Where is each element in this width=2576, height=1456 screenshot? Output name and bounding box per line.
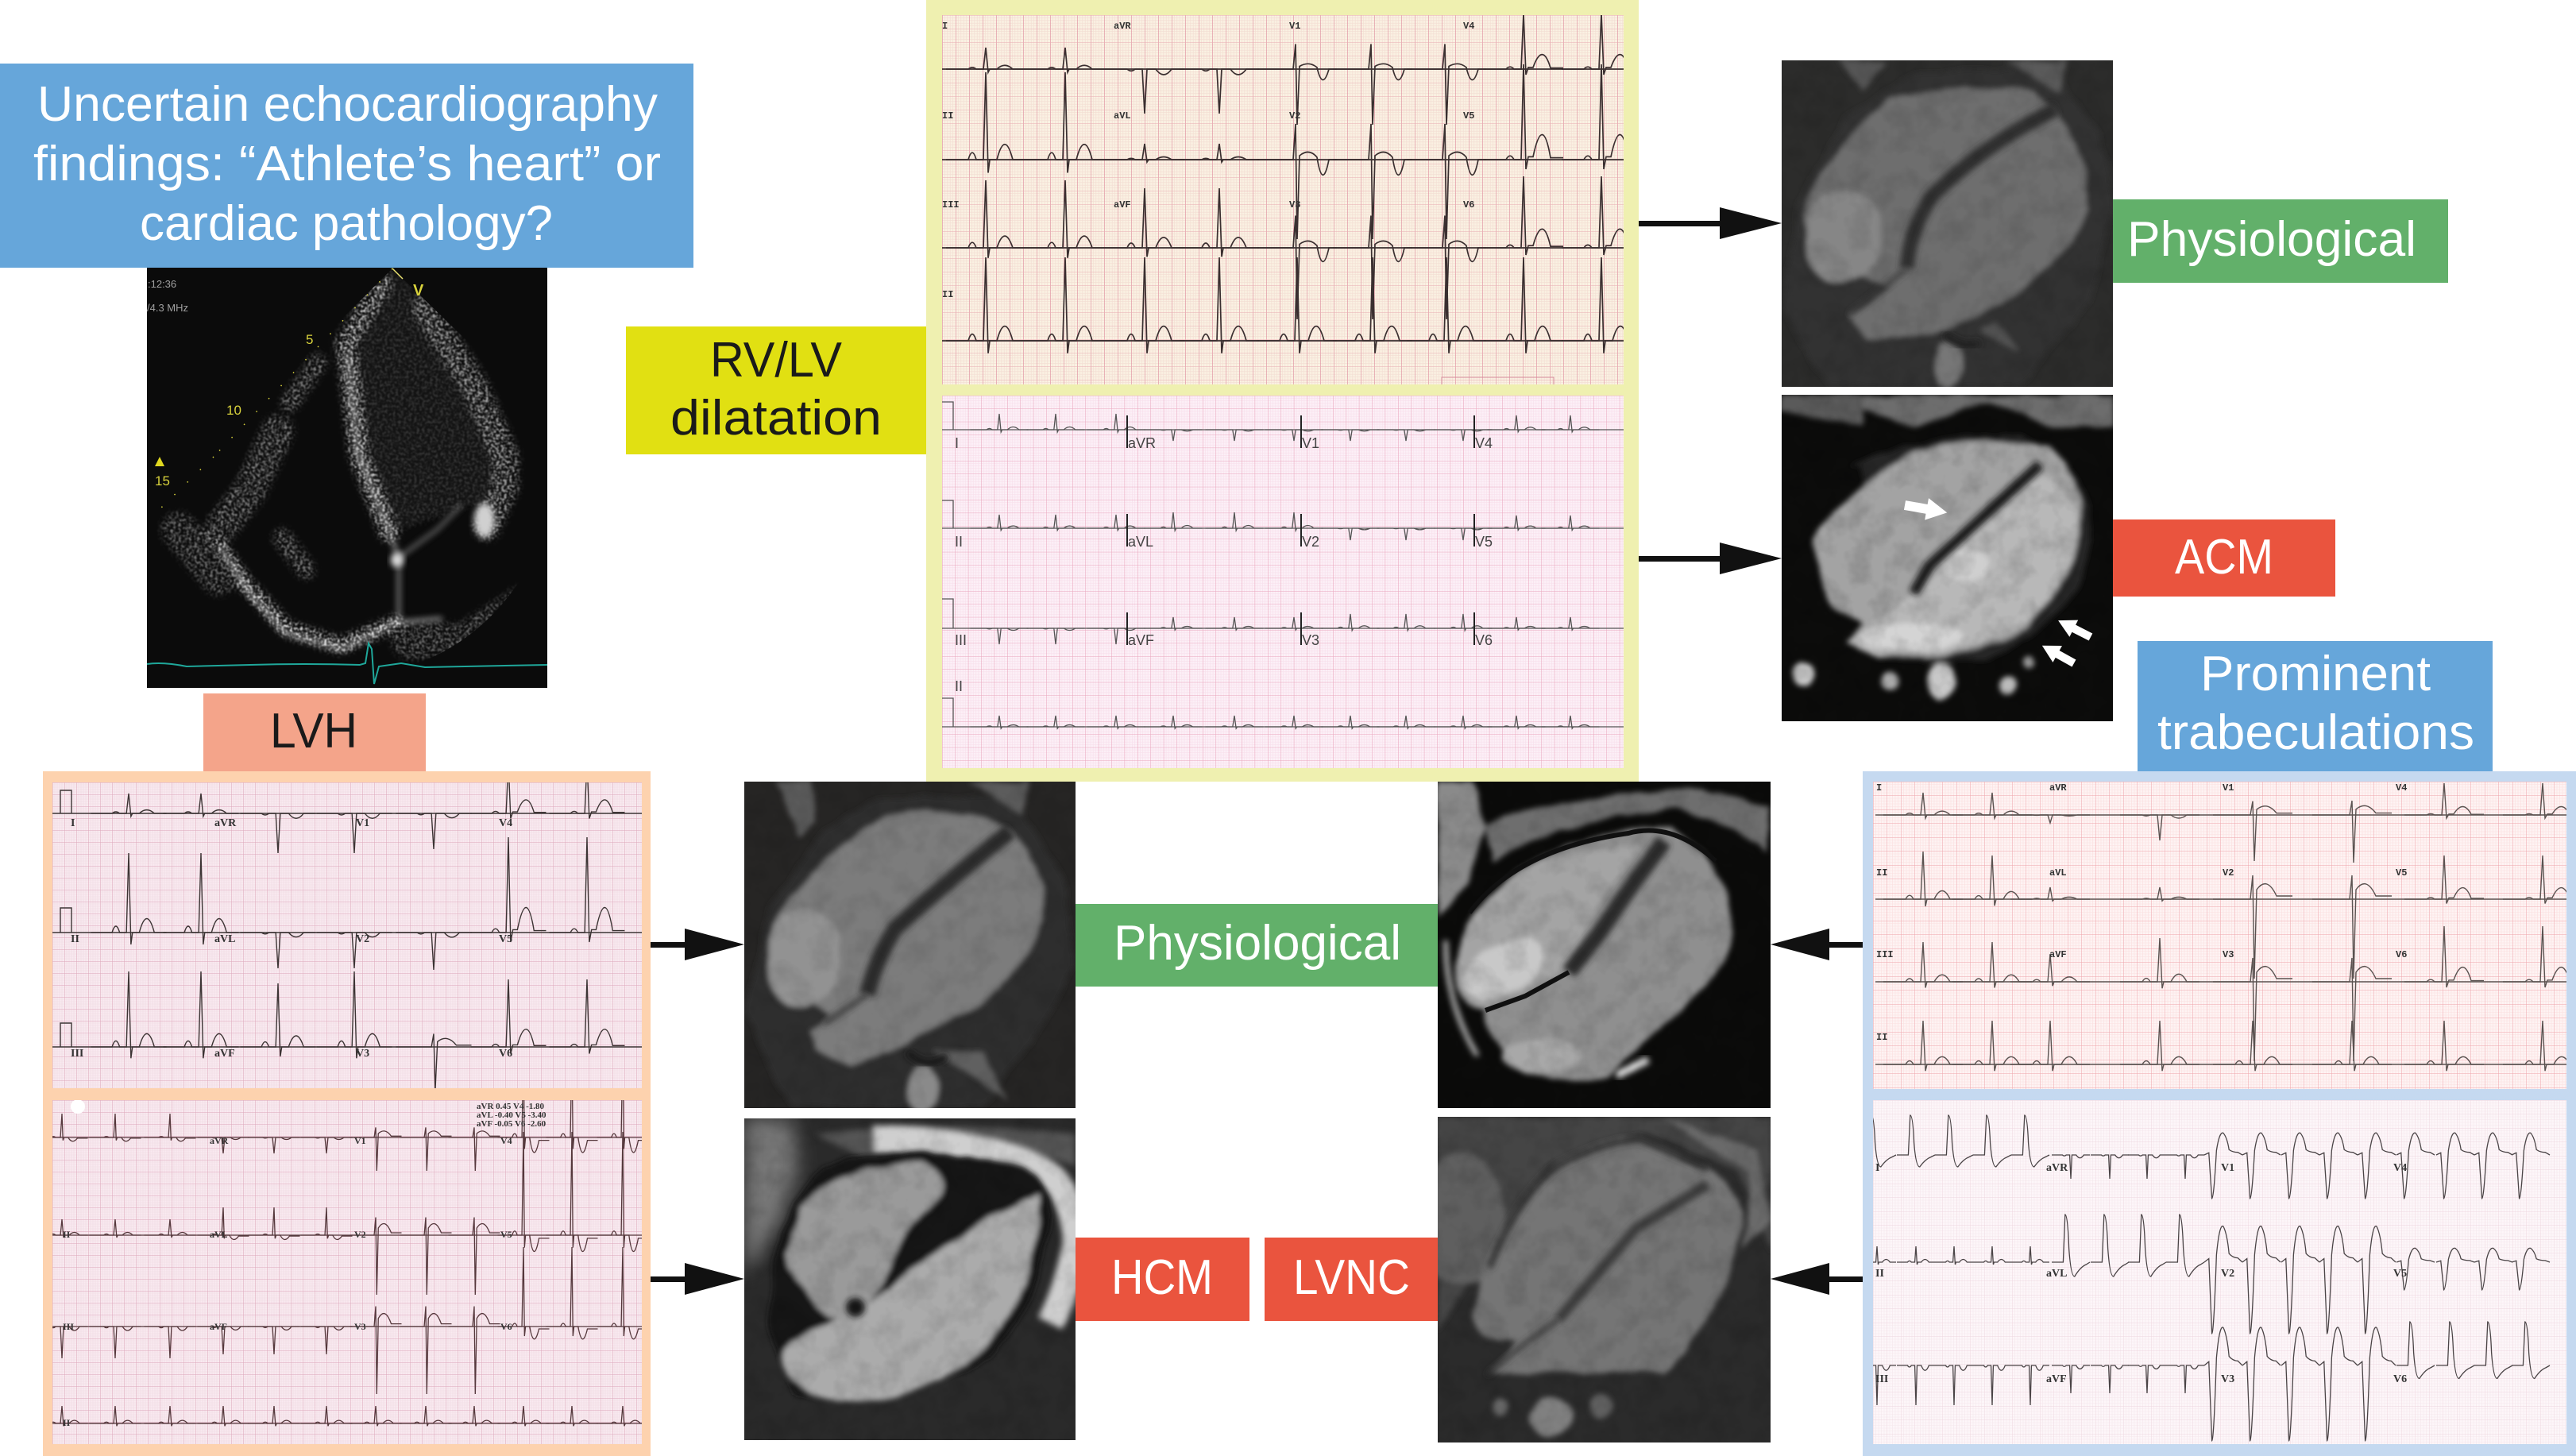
ECG: left ventricular noncompaction: II bbox=[1875, 1268, 1884, 1280]
ECG: hypertrophic cardiomyopathy: V2 bbox=[354, 1229, 366, 1240]
ECG: physiological trabeculations: II bbox=[1876, 1032, 1887, 1043]
depth scale markers bbox=[155, 268, 424, 510]
arrow: LVH HCM ECG to CMR bbox=[651, 1263, 744, 1295]
ECG: left ventricular noncompaction: I bbox=[1875, 1162, 1879, 1174]
CMR image: ACM with arrows bbox=[1782, 395, 2113, 721]
ECG: hypertrophic cardiomyopathy: aVL -0.40 V5 -3.40 bbox=[477, 1110, 546, 1120]
label: RV/LV dilatation: dilatation bbox=[670, 391, 882, 446]
CMR image: LVNC bbox=[1438, 1117, 1771, 1442]
ECG: physiological trabeculations: II bbox=[1876, 867, 1887, 879]
ECG: physiological RV/LV dilatation bbox=[942, 15, 1624, 384]
arrow: LVNC ECG to CMR bbox=[1771, 1263, 1863, 1295]
ECG: hypertrophic cardiomyopathy: III bbox=[63, 1321, 74, 1332]
ECG: left ventricular noncompaction: aVL bbox=[2046, 1268, 2067, 1280]
label: RV/LV dilatation: RV/LV bbox=[710, 333, 843, 388]
ECG: physiological RV/LV dilatation: V4 bbox=[1463, 21, 1474, 32]
ECG: hypertrophic cardiomyopathy: II bbox=[63, 1229, 71, 1240]
panel: RV/LV dilatation ECGs bbox=[926, 0, 1641, 782]
ECG: physiological RV/LV dilatation: III bbox=[942, 199, 960, 210]
ECG: physiological trabeculations bbox=[1873, 782, 2566, 1089]
ECG: physiological trabeculations: III bbox=[1876, 949, 1894, 960]
ECG: physiological LVH: V5 bbox=[499, 933, 512, 945]
ECG: physiological trabeculations: V6 bbox=[2396, 949, 2407, 960]
ECG: left ventricular noncompaction: V4 bbox=[2393, 1162, 2407, 1174]
label: RV/LV dilatation bbox=[626, 326, 926, 454]
ECG: physiological LVH: aVR bbox=[214, 817, 237, 829]
arrow: LVH physiological ECG to CMR bbox=[651, 929, 744, 960]
echocardiogram image bbox=[147, 268, 547, 688]
ECG: physiological RV/LV dilatation: V5 bbox=[1463, 110, 1474, 122]
arrow: trabeculations physiological ECG to CMR bbox=[1771, 929, 1863, 960]
label: HCM: HCM bbox=[1111, 1250, 1213, 1305]
ECG: left ventricular noncompaction: V5 bbox=[2393, 1268, 2407, 1280]
ECG: hypertrophic cardiomyopathy: aVR 0.45 V4 -1.80 bbox=[477, 1102, 545, 1111]
ECG: arrhythmogenic cardiomyopathy: V5 bbox=[1475, 534, 1493, 550]
arrow: physiological ECG to CMR bbox=[1639, 207, 1782, 239]
CMR image: HCM bbox=[744, 1118, 1076, 1440]
white arrows bbox=[1903, 494, 2095, 671]
ECG: arrhythmogenic cardiomyopathy: aVF bbox=[1128, 632, 1154, 648]
ECG: left ventricular noncompaction: aVF bbox=[2046, 1373, 2067, 1385]
ECG: physiological trabeculations: V1 bbox=[2223, 782, 2234, 794]
label: LVH bbox=[203, 693, 426, 771]
ECG: physiological trabeculations: V3 bbox=[2223, 949, 2234, 960]
ECG: arrhythmogenic cardiomyopathy: V6 bbox=[1475, 632, 1493, 648]
ECG: arrhythmogenic cardiomyopathy: V2 bbox=[1302, 534, 1319, 550]
echo time and frequency text: :12:36 bbox=[148, 278, 176, 290]
ECG: arrhythmogenic cardiomyopathy: aVL bbox=[1128, 534, 1153, 550]
label: HCM bbox=[1076, 1238, 1249, 1321]
ECG: left ventricular noncompaction: V6 bbox=[2393, 1373, 2407, 1385]
ECG: arrhythmogenic cardiomyopathy: III bbox=[955, 632, 967, 648]
label: Prominent trabeculations bbox=[2138, 641, 2493, 771]
title: uncertain echocardiography findings: Uncertain echocardiography bbox=[37, 77, 658, 132]
depth scale markers: V bbox=[413, 282, 424, 299]
label: Physiological (center): Physiological bbox=[1114, 916, 1401, 971]
ECG: physiological RV/LV dilatation: V2 bbox=[1289, 110, 1300, 122]
ECG: left ventricular noncompaction: aVR bbox=[2046, 1162, 2068, 1174]
ECG: arrhythmogenic cardiomyopathy: V4 bbox=[1475, 435, 1493, 451]
ECG: physiological LVH: V2 bbox=[356, 933, 369, 945]
title: uncertain echocardiography findings: cardiac pathology? bbox=[140, 196, 553, 251]
ECG: physiological RV/LV dilatation: V6 bbox=[1463, 199, 1474, 210]
ECG: arrhythmogenic cardiomyopathy: II bbox=[955, 534, 963, 550]
depth scale markers: 15 bbox=[155, 473, 170, 489]
ECG: physiological RV/LV dilatation: V1 bbox=[1289, 21, 1300, 32]
ECG: physiological LVH: III bbox=[71, 1048, 83, 1060]
ECG: physiological trabeculations: aVL bbox=[2049, 867, 2067, 879]
ECG: left ventricular noncompaction bbox=[1873, 1100, 2566, 1444]
ECG: physiological RV/LV dilatation: aVF bbox=[1114, 199, 1131, 210]
title: uncertain echocardiography findings: findings: “Athlete’s heart” or bbox=[33, 137, 661, 191]
arrow: ACM ECG to CMR bbox=[1639, 543, 1782, 574]
echo time and frequency text bbox=[147, 278, 188, 314]
label: ACM: ACM bbox=[2175, 530, 2273, 585]
title: uncertain echocardiography findings bbox=[0, 64, 693, 268]
ECG: physiological trabeculations: aVF bbox=[2049, 949, 2067, 960]
ECG: arrhythmogenic cardiomyopathy: II bbox=[955, 678, 963, 694]
ECG: hypertrophic cardiomyopathy: V4 bbox=[500, 1135, 512, 1146]
ECG: arrhythmogenic cardiomyopathy: I bbox=[955, 435, 959, 451]
label: LVNC bbox=[1265, 1238, 1438, 1321]
label: Physiological (center) bbox=[1076, 904, 1438, 987]
ECG: physiological LVH: V4 bbox=[499, 817, 512, 829]
depth scale markers: 5 bbox=[306, 332, 313, 347]
ECG: physiological trabeculations: V5 bbox=[2396, 867, 2407, 879]
ECG: physiological LVH: I bbox=[71, 817, 75, 829]
label: Prominent trabeculations: Prominent bbox=[2200, 647, 2431, 701]
ECG: physiological RV/LV dilatation: II bbox=[942, 110, 953, 122]
ECG: physiological LVH: V1 bbox=[356, 817, 369, 829]
ECG: hypertrophic cardiomyopathy: V5 bbox=[500, 1229, 512, 1240]
depth scale markers: 10 bbox=[226, 403, 241, 418]
ECG: hypertrophic cardiomyopathy: II bbox=[63, 1417, 71, 1428]
CMR image: physiological RV dilatation bbox=[1782, 60, 2113, 387]
ECG: hypertrophic cardiomyopathy: V1 bbox=[354, 1135, 366, 1146]
ECG: physiological trabeculations: aVR bbox=[2049, 782, 2067, 794]
ECG: physiological LVH: V3 bbox=[356, 1048, 369, 1060]
ECG: arrhythmogenic cardiomyopathy: aVR bbox=[1128, 435, 1156, 451]
ECG: hypertrophic cardiomyopathy: aVF -0.05 V6 -2.60 bbox=[477, 1119, 546, 1129]
CMR image: physiological trabeculations bbox=[1438, 782, 1771, 1108]
ECG: physiological LVH: V6 bbox=[499, 1048, 512, 1060]
label: Physiological (RV/LV dilatation) bbox=[2113, 199, 2448, 283]
ECG: hypertrophic cardiomyopathy: aVF bbox=[210, 1321, 227, 1332]
panel: prominent trabeculations ECGs bbox=[1858, 771, 2576, 1456]
echo time and frequency text: /4.3 MHz bbox=[147, 302, 188, 314]
ECG: physiological RV/LV dilatation: aVR bbox=[1114, 21, 1131, 32]
ECG: physiological RV/LV dilatation: V3 bbox=[1289, 199, 1300, 210]
ECG: hypertrophic cardiomyopathy: V3 bbox=[354, 1321, 366, 1332]
ECG: hypertrophic cardiomyopathy: V6 bbox=[500, 1321, 512, 1332]
ECG: left ventricular noncompaction: III bbox=[1875, 1373, 1888, 1385]
ECG: physiological RV/LV dilatation: II bbox=[942, 289, 953, 300]
panel: LVH ECGs bbox=[37, 762, 651, 1456]
ECG: hypertrophic cardiomyopathy bbox=[52, 1100, 642, 1444]
label: Physiological (RV/LV dilatation): Physiological bbox=[2127, 212, 2416, 267]
label: LVNC: LVNC bbox=[1293, 1250, 1410, 1305]
ECG: physiological trabeculations: V2 bbox=[2223, 867, 2234, 879]
label: Prominent trabeculations: trabeculations bbox=[2157, 705, 2474, 760]
ECG: left ventricular noncompaction: V2 bbox=[2221, 1268, 2234, 1280]
ECG: hypertrophic cardiomyopathy: aVR bbox=[210, 1135, 229, 1146]
ECG: left ventricular noncompaction: V3 bbox=[2221, 1373, 2234, 1385]
ECG: physiological LVH: II bbox=[71, 933, 79, 945]
teal ECG trace bbox=[147, 643, 547, 684]
ECG: physiological trabeculations: I bbox=[1876, 782, 1882, 794]
label: ACM bbox=[2113, 519, 2335, 597]
CMR image: physiological LVH bbox=[744, 782, 1076, 1108]
ECG: physiological RV/LV dilatation: aVL bbox=[1114, 110, 1131, 122]
ECG: physiological trabeculations: V4 bbox=[2396, 782, 2407, 794]
ECG: physiological LVH bbox=[52, 782, 642, 1088]
ECG: hypertrophic cardiomyopathy: aVL bbox=[210, 1229, 228, 1240]
ECG: arrhythmogenic cardiomyopathy: V3 bbox=[1302, 632, 1319, 648]
ECG: physiological LVH: aVL bbox=[214, 933, 235, 945]
ECG: arrhythmogenic cardiomyopathy: V1 bbox=[1302, 435, 1319, 451]
ECG: arrhythmogenic cardiomyopathy bbox=[942, 396, 1624, 768]
label: LVH: LVH bbox=[270, 704, 357, 759]
ECG: left ventricular noncompaction: V1 bbox=[2221, 1162, 2234, 1174]
ECG: physiological RV/LV dilatation: I bbox=[942, 21, 948, 32]
ECG: physiological LVH: aVF bbox=[214, 1048, 235, 1060]
